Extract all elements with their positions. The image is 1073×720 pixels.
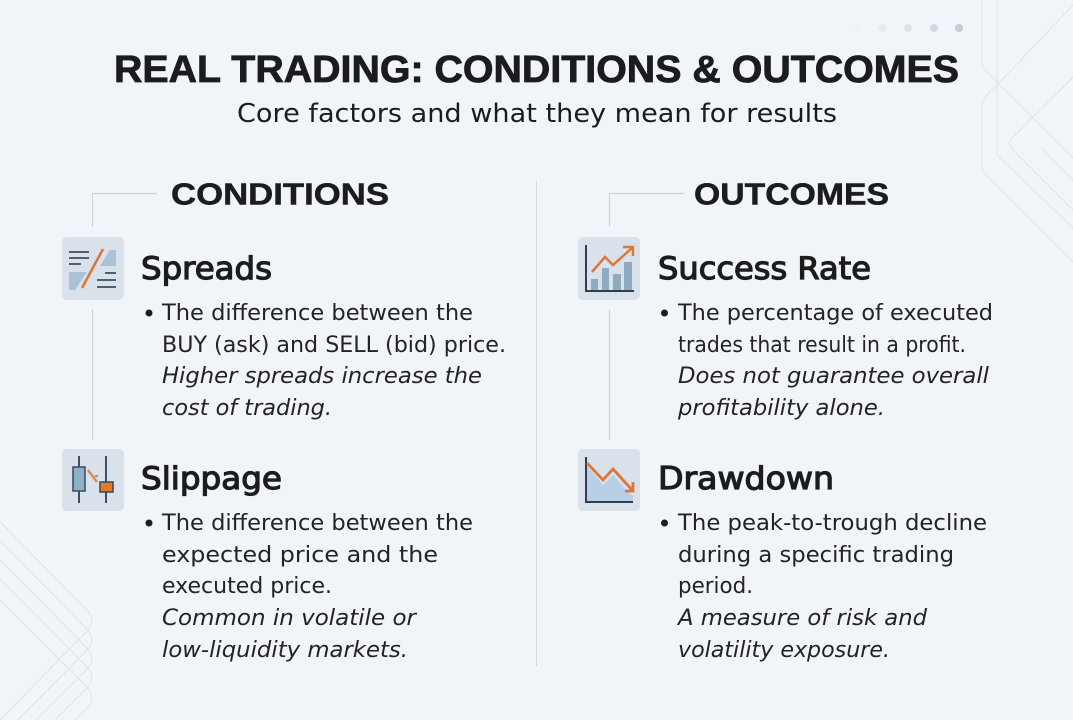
- drawdown text: The peak-to-trough decline: [677, 511, 987, 536]
- conditions heading: CONDITIONS: [171, 176, 389, 212]
- success rate text: Does not guarantee overall: [678, 364, 989, 389]
- success rate text: trades that result in a profit.: [678, 333, 966, 358]
- slippage text: expected price and the: [162, 543, 438, 568]
- panel: outcomes: [578, 176, 993, 663]
- drawdown text: [661, 511, 987, 663]
- title: REAL TRADING: CONDITIONS & OUTCOMES: [114, 49, 959, 91]
- drawdown text: period.: [678, 574, 753, 599]
- subtitle: Core factors and what they mean for results: [237, 99, 837, 129]
- spreads text: The difference between the: [161, 301, 473, 326]
- slippage text: The difference between the: [161, 511, 473, 536]
- decorative dots top right: [854, 24, 963, 32]
- drawdown text: A measure of risk and: [676, 606, 928, 631]
- icon: drawdown: [578, 449, 640, 511]
- slippage text: executed price.: [162, 574, 332, 599]
- center divider: [536, 181, 538, 666]
- spreads text: cost of trading.: [162, 396, 332, 421]
- drawdown heading: Drawdown: [658, 461, 834, 497]
- success rate text: The percentage of executed: [677, 301, 993, 326]
- spreads text: [146, 301, 506, 421]
- slippage text: Common in volatile or: [162, 606, 418, 631]
- success rate text: profitability alone.: [677, 396, 885, 421]
- decorative lines bottom left: [0, 522, 92, 720]
- success rate text: [661, 301, 993, 421]
- spreads text: BUY (ask) and SELL (bid) price.: [162, 333, 506, 358]
- decorative lines top right: [982, 0, 1073, 262]
- slippage text: [146, 511, 473, 663]
- icon: slippage: [62, 449, 124, 511]
- slippage heading: Slippage: [141, 461, 282, 497]
- drawdown text: during a specific trading: [678, 543, 954, 568]
- icon: spreads: [62, 237, 124, 300]
- success rate heading: Success Rate: [658, 251, 871, 287]
- drawdown text: volatility exposure.: [678, 638, 890, 663]
- spreads heading: Spreads: [141, 251, 272, 287]
- spreads text: Higher spreads increase the: [162, 364, 482, 389]
- panel: conditions: [62, 176, 506, 663]
- conditions connector: [92, 194, 157, 440]
- outcomes heading: OUTCOMES: [694, 176, 889, 212]
- outcomes connector: [610, 194, 684, 440]
- slippage text: low-liquidity markets.: [162, 638, 408, 663]
- icon: success rate: [578, 237, 640, 300]
